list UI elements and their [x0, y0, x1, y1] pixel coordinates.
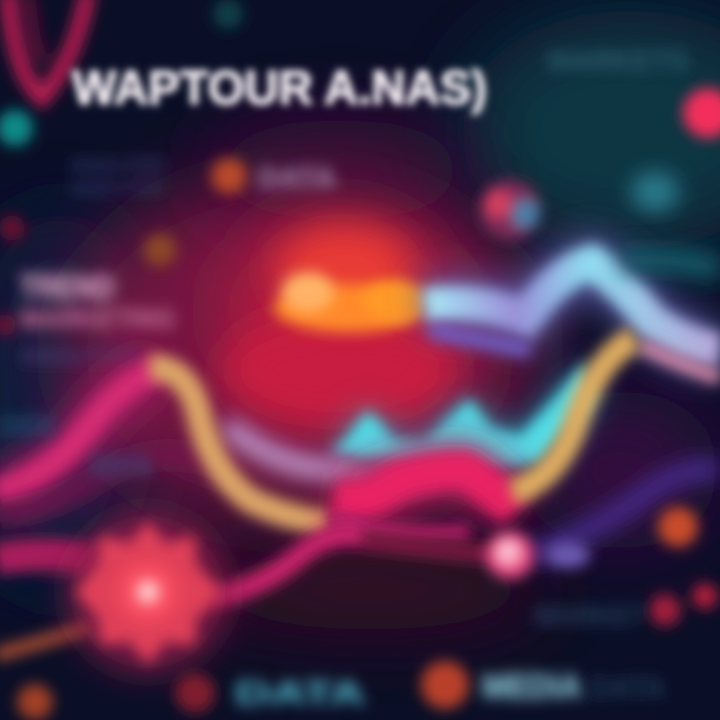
icon: bottom orange dot: [421, 661, 469, 709]
chart: tan ribbon left: [150, 368, 330, 522]
icon: multicolour disc: [480, 180, 540, 240]
icon: bottom left orange dot: [17, 684, 53, 720]
text block: top right: MARKETS: [548, 45, 688, 76]
text block: left: [20, 269, 175, 370]
chart: pink ribbon left: [0, 368, 230, 515]
text block: upper left: ANALYSIS: [70, 155, 165, 177]
chart: cyan ribbon: [330, 362, 592, 472]
chart: teal ribbon top right: [620, 260, 720, 270]
label: bottom right: DATA: [590, 672, 665, 705]
chart: pink-red ribbon centre: [330, 470, 515, 533]
text block: left: TREND: [20, 269, 115, 305]
chart: tan ribbon right: [512, 338, 635, 492]
text block: upper left: [70, 155, 165, 199]
label: bottom centre-right: MEDIA: [482, 668, 582, 706]
chart: pale blue ribbon: [425, 262, 720, 378]
chart: pink lower ribbon: [0, 534, 500, 655]
icon: orange dot with label: [211, 158, 336, 195]
icon: bright pink node: [486, 531, 590, 579]
icon: faint teal dot top: [213, 0, 243, 29]
text block: lower right: MARKET: [535, 600, 645, 631]
icon: pink dot top right: [683, 88, 720, 138]
icon: crimson nodes right: [649, 583, 718, 626]
text block: upper left: ANALYSIS: [70, 177, 165, 199]
icon: small crimson dots left: [0, 215, 25, 336]
text block: left: MARKETING: [20, 303, 175, 334]
text block: left lower labels: [0, 410, 152, 483]
icon: glowing sunburst: [70, 514, 226, 670]
icon: crimson V mark: [8, 0, 88, 98]
central glow: [220, 210, 460, 430]
icon: amber dot: [144, 234, 176, 266]
text block: left: ANALYSIS: [20, 343, 140, 370]
label: bottom centre-left: DATA: [235, 675, 365, 711]
chart: violet ribbon lower right: [530, 469, 720, 555]
icon: teal dot: [0, 110, 33, 146]
icon: teal marker right: [631, 172, 679, 212]
icon: bottom crimson dot: [175, 673, 215, 713]
text block: left lower labels: DATA: [92, 450, 152, 483]
icon: orange dot with label: DATA: [258, 162, 336, 195]
text block: left lower labels: DATA: [0, 410, 55, 443]
footer: legend items: [17, 661, 665, 720]
title: WAPTOUR A.NAS): [72, 62, 487, 115]
icon: orange node right: [658, 507, 698, 547]
chart: lavender ribbon: [225, 425, 420, 480]
